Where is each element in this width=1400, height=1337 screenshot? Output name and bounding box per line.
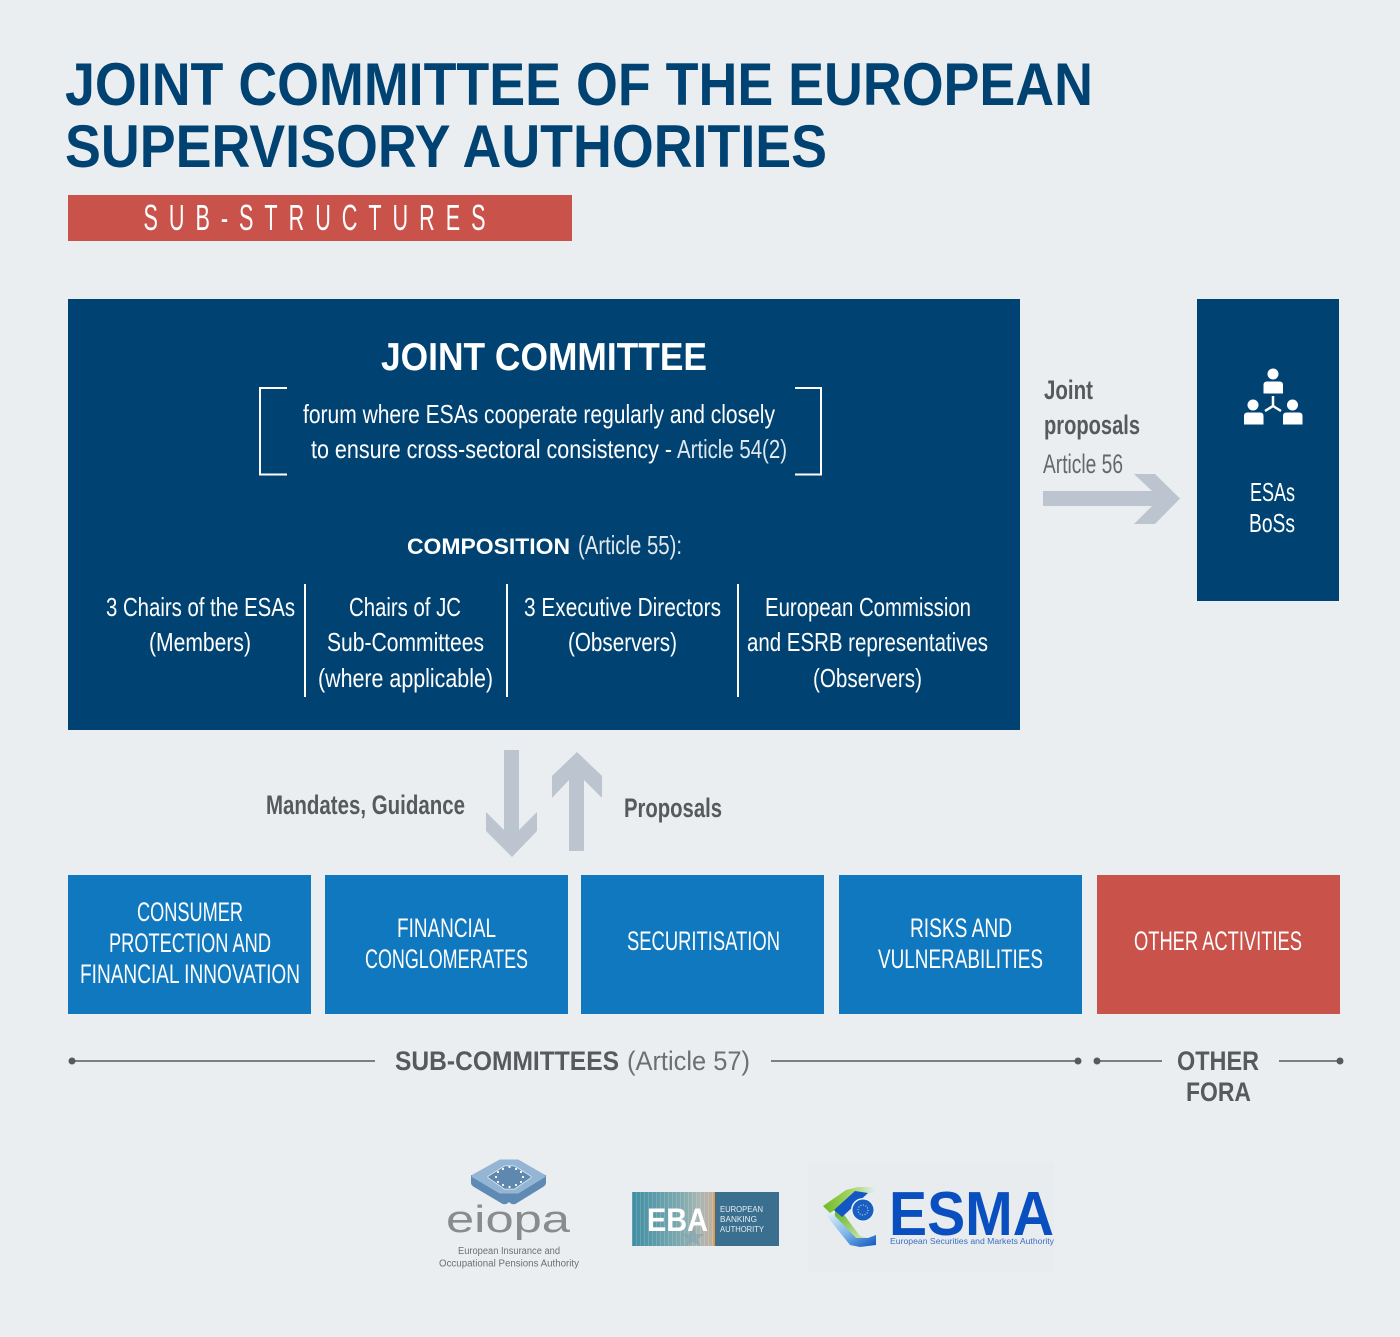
box: securitisation: SECURITISATION bbox=[627, 926, 780, 956]
logo: EBA bbox=[632, 1192, 779, 1246]
label: proposals: Proposals bbox=[624, 793, 722, 823]
bracketed description bbox=[260, 388, 821, 474]
logo: EIOPA: European Insurance and bbox=[458, 1246, 560, 1257]
box: risks and vulnerabilities bbox=[839, 875, 1082, 1014]
logo: EBA: EBA bbox=[647, 1202, 708, 1238]
bracketed description: to ensure cross-sectoral consistency - bbox=[311, 434, 672, 464]
icon: people network bbox=[1244, 368, 1302, 424]
composition: chairs of JC sub-committees: Sub-Committees bbox=[327, 627, 484, 657]
box: risks and vulnerabilities: VULNERABILITIES bbox=[878, 944, 1043, 974]
box: risks and vulnerabilities: RISKS AND bbox=[910, 913, 1012, 943]
joint proposals label: proposals bbox=[1044, 410, 1140, 440]
composition: commission and ESRB: and ESRB representatives bbox=[747, 627, 988, 657]
title bbox=[65, 51, 1093, 180]
composition: chairs of JC sub-committees: Chairs of JC bbox=[349, 592, 461, 622]
box: other activities bbox=[1097, 875, 1340, 1014]
title: SUPERVISORY AUTHORITIES bbox=[65, 113, 827, 180]
composition: chairs of the ESAs: 3 Chairs of the ESAs bbox=[106, 592, 295, 622]
logo: ESMA bbox=[808, 1163, 1054, 1272]
title: JOINT COMMITTEE OF THE EUROPEAN bbox=[65, 51, 1093, 118]
bracket label: sub-committees: (Article 57) bbox=[627, 1046, 750, 1076]
arrow: down bbox=[486, 750, 537, 857]
box: consumer protection: FINANCIAL INNOVATION bbox=[80, 959, 300, 989]
bracket label: other fora bbox=[1094, 1046, 1344, 1107]
box: financial conglomerates: CONGLOMERATES bbox=[365, 944, 528, 974]
box: consumer protection: PROTECTION AND bbox=[109, 928, 271, 958]
composition: chairs of the ESAs: (Members) bbox=[149, 627, 251, 657]
banner: sub-structures: SUB-STRUCTURES bbox=[144, 198, 486, 238]
composition: executive directors bbox=[524, 592, 721, 657]
logo: EBA: AUTHORITY bbox=[720, 1225, 765, 1234]
composition: commission and ESRB: (Observers) bbox=[813, 663, 922, 693]
bracketed description: forum where ESAs cooperate regularly and closely bbox=[303, 399, 775, 429]
box: financial conglomerates: FINANCIAL bbox=[397, 913, 496, 943]
composition: chairs of the ESAs bbox=[106, 592, 295, 657]
composition: executive directors: 3 Executive Directors bbox=[524, 592, 721, 622]
joint proposals label bbox=[1043, 375, 1140, 479]
panel: ESAs BoSs bbox=[1197, 299, 1339, 601]
bracket label: sub-committees: SUB-COMMITTEES bbox=[395, 1046, 619, 1076]
box: other activities: OTHER ACTIVITIES bbox=[1134, 926, 1302, 956]
banner: sub-structures bbox=[68, 195, 572, 241]
composition heading: (Article 55): bbox=[578, 530, 682, 560]
composition heading bbox=[407, 530, 682, 560]
arrow: up bbox=[552, 752, 602, 851]
box: consumer protection bbox=[68, 875, 311, 1014]
panel label: ESAs bbox=[1250, 477, 1295, 507]
logo: EIOPA bbox=[439, 1161, 579, 1270]
logo: EIOPA: Occupational Pensions Authority bbox=[439, 1258, 579, 1270]
panel label bbox=[1249, 477, 1295, 538]
composition: commission and ESRB bbox=[747, 592, 988, 693]
bracketed description: Article 54(2) bbox=[677, 434, 787, 464]
composition: chairs of JC sub-committees: (where applicable) bbox=[318, 663, 493, 693]
logo: ESMA: European Securities and Markets Authority bbox=[890, 1237, 1054, 1246]
composition: executive directors: (Observers) bbox=[568, 627, 677, 657]
bracket label: other fora: OTHER bbox=[1177, 1046, 1259, 1076]
box: financial conglomerates bbox=[325, 875, 568, 1014]
arrow: to ESAs BoSs bbox=[1043, 474, 1180, 524]
panel heading: JOINT COMMITTEE bbox=[381, 336, 707, 379]
composition: commission and ESRB: European Commission bbox=[765, 592, 971, 622]
logo: ESMA: ESMA bbox=[889, 1180, 1054, 1249]
composition heading: COMPOSITION bbox=[407, 534, 570, 559]
bracket label: sub-committees bbox=[68, 1046, 1082, 1076]
composition: chairs of JC sub-committees bbox=[318, 592, 493, 693]
panel label: BoSs bbox=[1249, 508, 1295, 538]
joint proposals label: Joint bbox=[1044, 375, 1093, 405]
panel: joint committee bbox=[68, 299, 1020, 730]
logo: EIOPA: eiopa bbox=[446, 1199, 571, 1241]
logo: EBA: EUROPEAN bbox=[720, 1205, 763, 1214]
label: mandates, guidance: Mandates, Guidance bbox=[266, 790, 465, 820]
bracket label: other fora: FORA bbox=[1186, 1077, 1251, 1107]
box: securitisation bbox=[581, 875, 824, 1014]
logo: EBA: BANKING bbox=[720, 1215, 757, 1224]
joint proposals label: Article 56 bbox=[1043, 449, 1123, 479]
box: consumer protection: CONSUMER bbox=[137, 897, 243, 927]
